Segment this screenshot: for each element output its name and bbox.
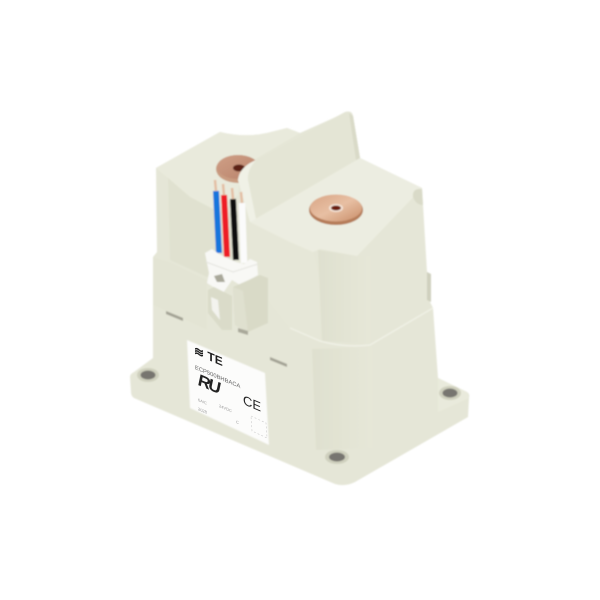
lower housing corner shading xyxy=(312,347,372,450)
CE mark: CE xyxy=(243,393,261,415)
white wire xyxy=(241,192,244,263)
housing slot right xyxy=(270,357,287,367)
ratings: 6A/C xyxy=(198,397,207,406)
part number: ECP500BHBACA xyxy=(195,365,241,391)
housing slot left xyxy=(166,311,183,321)
wire connector plug xyxy=(205,249,258,293)
corner notch xyxy=(413,189,423,205)
side tab xyxy=(427,272,431,302)
red wire xyxy=(223,184,227,257)
relay silhouette with mounting flange xyxy=(130,112,469,485)
back copper terminal xyxy=(216,155,260,183)
insulating fin xyxy=(238,112,360,222)
left block top face xyxy=(156,128,300,210)
date code box xyxy=(251,416,267,438)
UL mark: RU xyxy=(198,370,222,399)
flange right hole area xyxy=(438,378,469,412)
connector housing xyxy=(208,275,268,335)
black wire xyxy=(232,188,236,260)
brand logo: ≋ TE xyxy=(194,343,223,369)
housing step line xyxy=(290,308,433,346)
right block front-left face xyxy=(250,222,320,342)
right block corner shading xyxy=(318,250,370,344)
regulatory mark: C xyxy=(236,419,239,425)
left block side face xyxy=(168,178,238,277)
coil voltage: 24VDC xyxy=(219,403,232,413)
flange bolt holes xyxy=(137,368,461,464)
product label xyxy=(187,340,269,445)
front copper terminal xyxy=(309,194,363,225)
lower housing left shoulder xyxy=(153,257,207,330)
rating year: 2028 xyxy=(198,406,208,415)
blue wire xyxy=(215,180,219,253)
wires xyxy=(215,180,244,263)
right block top face xyxy=(250,158,422,256)
